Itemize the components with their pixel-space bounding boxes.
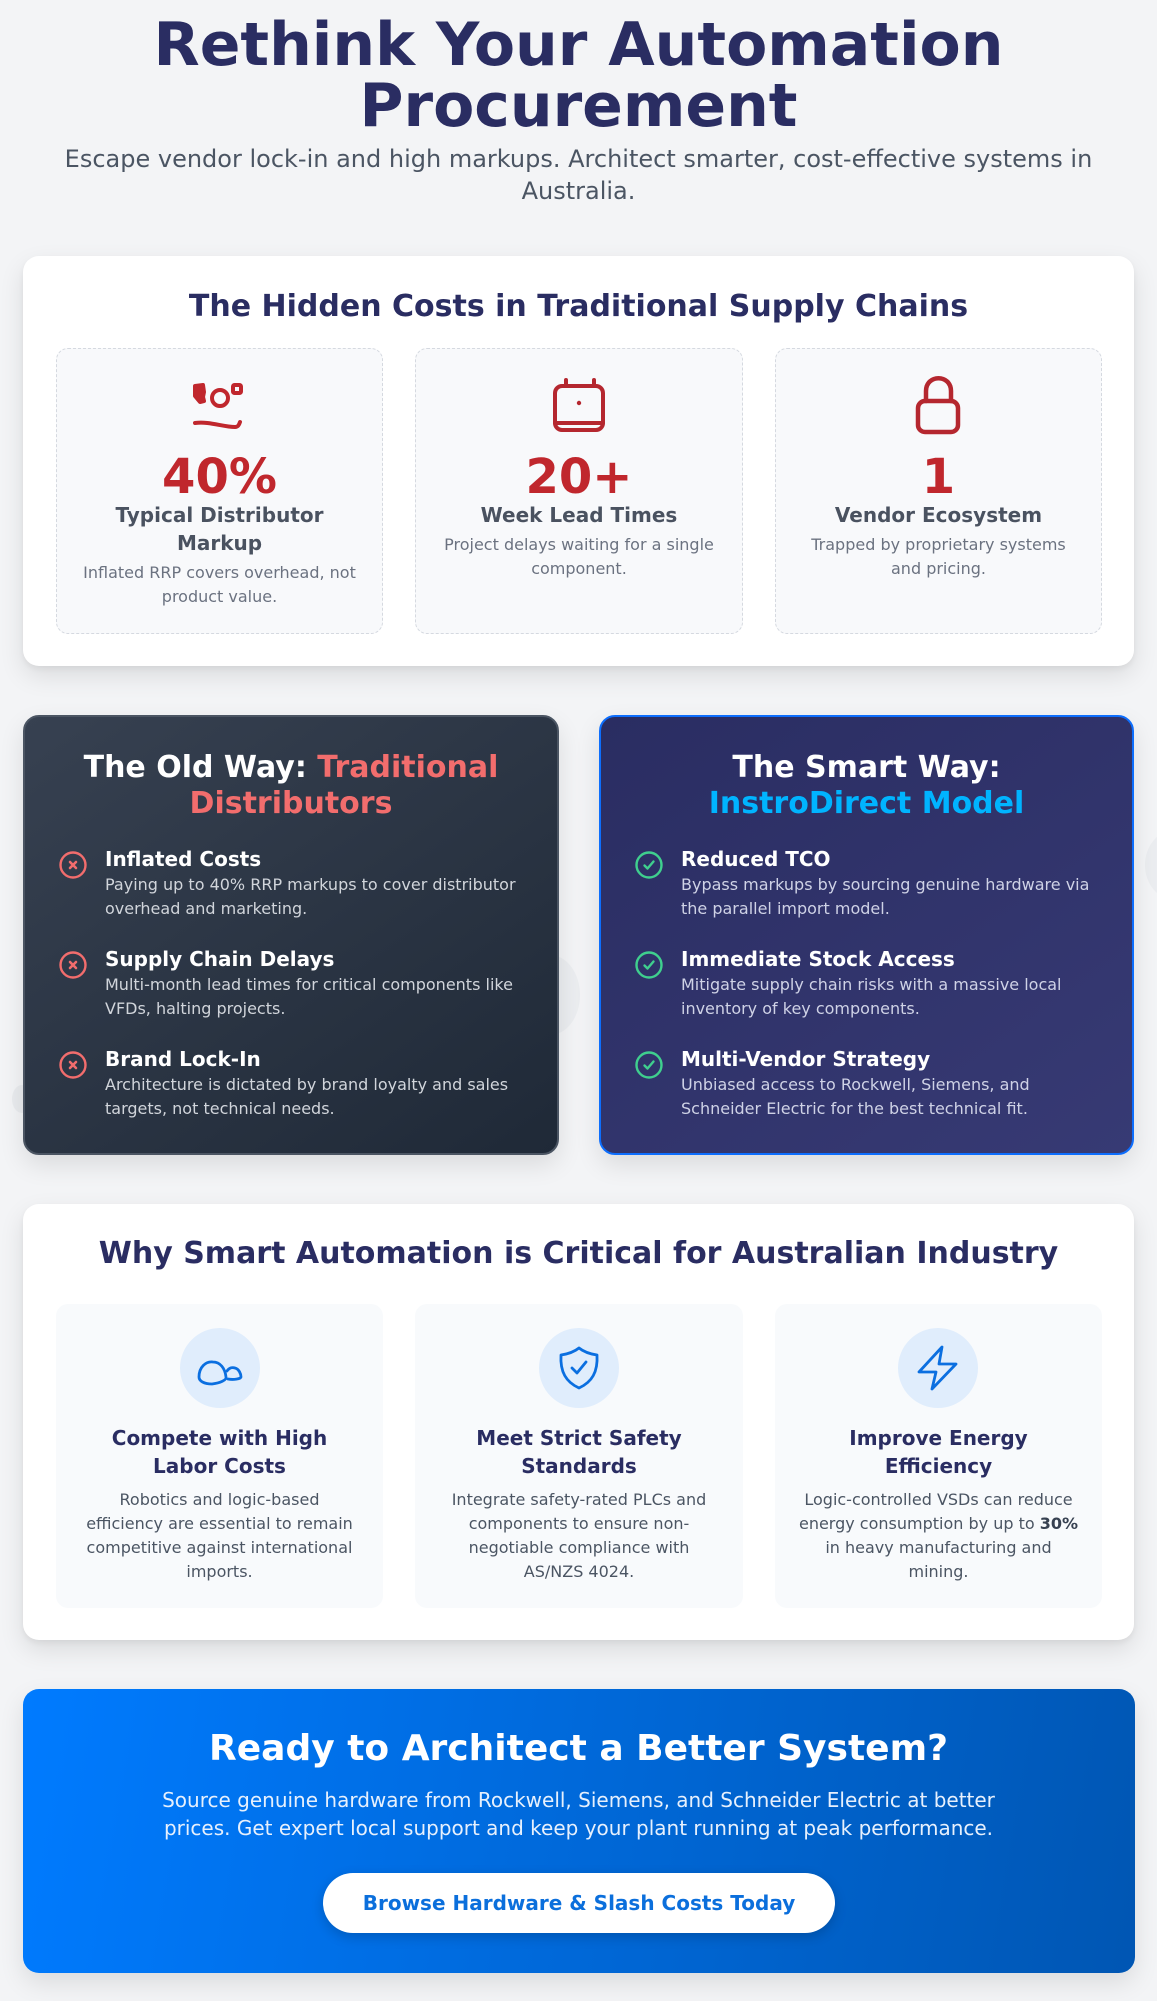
heading: old way: The Old Way: Traditional: [84, 750, 498, 784]
panel: smart way: [599, 715, 1134, 1155]
benefit heading: Compete with High: [112, 1426, 327, 1450]
stat number: 1: [922, 449, 955, 505]
stat label: [115, 503, 324, 555]
benefit heading: Meet Strict Safety: [476, 1426, 682, 1450]
background blob: centre: [520, 955, 580, 1035]
benefit card: safety: [415, 1304, 743, 1608]
stat label: Markup: [177, 531, 262, 555]
icon: cross: [59, 951, 87, 979]
item heading: Supply Chain Delays: [105, 947, 334, 971]
subtitle: Escape vendor lock-in and high markups. Architect smarter, cost-effective systems in: [65, 145, 1092, 173]
benefit heading: [476, 1426, 682, 1478]
stat number: 20+: [525, 449, 632, 505]
heading: hidden costs: The Hidden Costs in Traditional Supply Chains: [189, 289, 968, 324]
benefit description: energy consumption by up to 30%: [799, 1514, 1078, 1533]
icon: cross: [59, 1051, 87, 1079]
title: Rethink Your Automation: [154, 10, 1003, 80]
item: reduced tco: [635, 847, 1089, 918]
benefit description: mining.: [908, 1562, 968, 1581]
item description: [105, 1075, 508, 1118]
stat card: 1: [775, 348, 1102, 634]
icon: lock: [916, 376, 960, 434]
stat card: 40%: [56, 348, 383, 634]
icon: check: [635, 851, 663, 879]
benefit description: components to ensure non-: [469, 1514, 689, 1533]
item description: Architecture is dictated by brand loyalty and sales: [105, 1075, 508, 1094]
cta text: prices. Get expert local support and keep your plant running at peak performance.: [164, 1816, 993, 1840]
benefit description: Integrate safety-rated PLCs and: [452, 1490, 706, 1509]
benefit card: labor: [56, 1304, 383, 1608]
benefit description: negotiable compliance with: [469, 1538, 689, 1557]
item: multi-vendor: [635, 1047, 1030, 1118]
background blob: left: [12, 1085, 32, 1113]
item description: [681, 1075, 1030, 1118]
benefit description: AS/NZS 4024.: [524, 1562, 634, 1581]
item heading: Reduced TCO: [681, 847, 831, 871]
item description: VFDs, halting projects.: [105, 999, 285, 1018]
benefit description: [86, 1490, 353, 1581]
stat description: [83, 563, 356, 606]
item heading: Multi-Vendor Strategy: [681, 1047, 930, 1071]
benefit description: efficiency are essential to remain: [86, 1514, 353, 1533]
cta button: [323, 1873, 835, 1933]
cta text: [162, 1788, 995, 1840]
item description: Bypass markups by sourcing genuine hardware via: [681, 875, 1089, 894]
item description: Schneider Electric for the best technical fit.: [681, 1099, 1028, 1118]
stat description: [444, 535, 714, 578]
icon: coins: [193, 383, 243, 429]
benefit description: imports.: [186, 1562, 253, 1581]
item description: Multi-month lead times for critical components like: [105, 975, 513, 994]
subtitle: Australia.: [522, 177, 635, 205]
benefit description: [799, 1490, 1078, 1581]
item heading: Immediate Stock Access: [681, 947, 955, 971]
icon: cross: [59, 851, 87, 879]
stat card: 20+: [415, 348, 743, 634]
benefit heading: Standards: [521, 1454, 637, 1478]
item heading: Inflated Costs: [105, 847, 261, 871]
benefit heading: [849, 1426, 1028, 1478]
title: Procurement: [360, 70, 797, 140]
benefit heading: Labor Costs: [153, 1454, 286, 1478]
cta text: Source genuine hardware from Rockwell, Siemens, and Schneider Electric at better: [162, 1788, 995, 1812]
stat description: Project delays waiting for a single: [444, 535, 714, 554]
background blob: right edge: [1145, 830, 1157, 900]
benefit description: Robotics and logic-based: [120, 1490, 319, 1509]
heading: smart way: InstroDirect Model: [709, 786, 1024, 820]
item description: the parallel import model.: [681, 899, 890, 918]
benefit description: [452, 1490, 706, 1581]
heading: old way: Distributors: [190, 786, 392, 820]
item description: targets, not technical needs.: [105, 1099, 335, 1118]
cta heading: Ready to Architect a Better System?: [209, 1728, 948, 1769]
benefit description: Logic-controlled VSDs can reduce: [804, 1490, 1073, 1509]
stat description: component.: [531, 559, 627, 578]
benefit description: competitive against international: [87, 1538, 352, 1557]
stat number: 40%: [162, 449, 277, 505]
stat description: [811, 535, 1066, 578]
item heading: Brand Lock-In: [105, 1047, 261, 1071]
stat description: and pricing.: [891, 559, 986, 578]
item description: overhead and marketing.: [105, 899, 307, 918]
benefit heading: [112, 1426, 327, 1478]
panel: old way: [23, 715, 559, 1155]
stat label: Vendor Ecosystem: [835, 503, 1042, 527]
item description: inventory of key components.: [681, 999, 920, 1018]
heading: smart way: The Smart Way:: [732, 750, 1001, 784]
icon: calendar: [553, 378, 605, 432]
panel: why smart automation: [23, 1204, 1134, 1640]
item description: Mitigate supply chain risks with a massive local: [681, 975, 1062, 994]
item description: [681, 875, 1089, 918]
stat description: Inflated RRP covers overhead, not: [83, 563, 356, 582]
stat label: Typical Distributor: [115, 503, 324, 527]
benefit description: in heavy manufacturing and: [825, 1538, 1052, 1557]
icon: cloud in circle: [180, 1328, 260, 1408]
stat description: product value.: [162, 587, 277, 606]
icon: check: [635, 1051, 663, 1079]
icon: shield in circle: [539, 1328, 619, 1408]
heading: old way: [84, 750, 498, 820]
subtitle: [65, 145, 1092, 205]
icon: bolt in circle: [898, 1328, 978, 1408]
benefit heading: Improve Energy: [849, 1426, 1028, 1450]
cta button: Browse Hardware & Slash Costs Today: [363, 1891, 795, 1915]
item: stock access: [635, 947, 1062, 1018]
stat description: Trapped by proprietary systems: [811, 535, 1066, 554]
item: inflated costs: [59, 847, 516, 918]
panel: hidden costs: [23, 256, 1134, 666]
benefit heading: Efficiency: [885, 1454, 992, 1478]
title: [154, 10, 1003, 140]
item description: [681, 975, 1062, 1018]
item description: Unbiased access to Rockwell, Siemens, and: [681, 1075, 1030, 1094]
stat label: Week Lead Times: [481, 503, 677, 527]
heading: why smart automation: Why Smart Automation is Critical for Australian Industry: [99, 1236, 1058, 1271]
item: supply chain delays: [59, 947, 513, 1018]
item: brand lock-in: [59, 1047, 508, 1118]
icon: check: [635, 951, 663, 979]
item description: Paying up to 40% RRP markups to cover distributor: [105, 875, 516, 894]
panel: call to action: [23, 1689, 1135, 1973]
item description: [105, 975, 513, 1018]
heading: smart way: [709, 750, 1024, 820]
benefit card: energy: [775, 1304, 1102, 1608]
item description: [105, 875, 516, 918]
